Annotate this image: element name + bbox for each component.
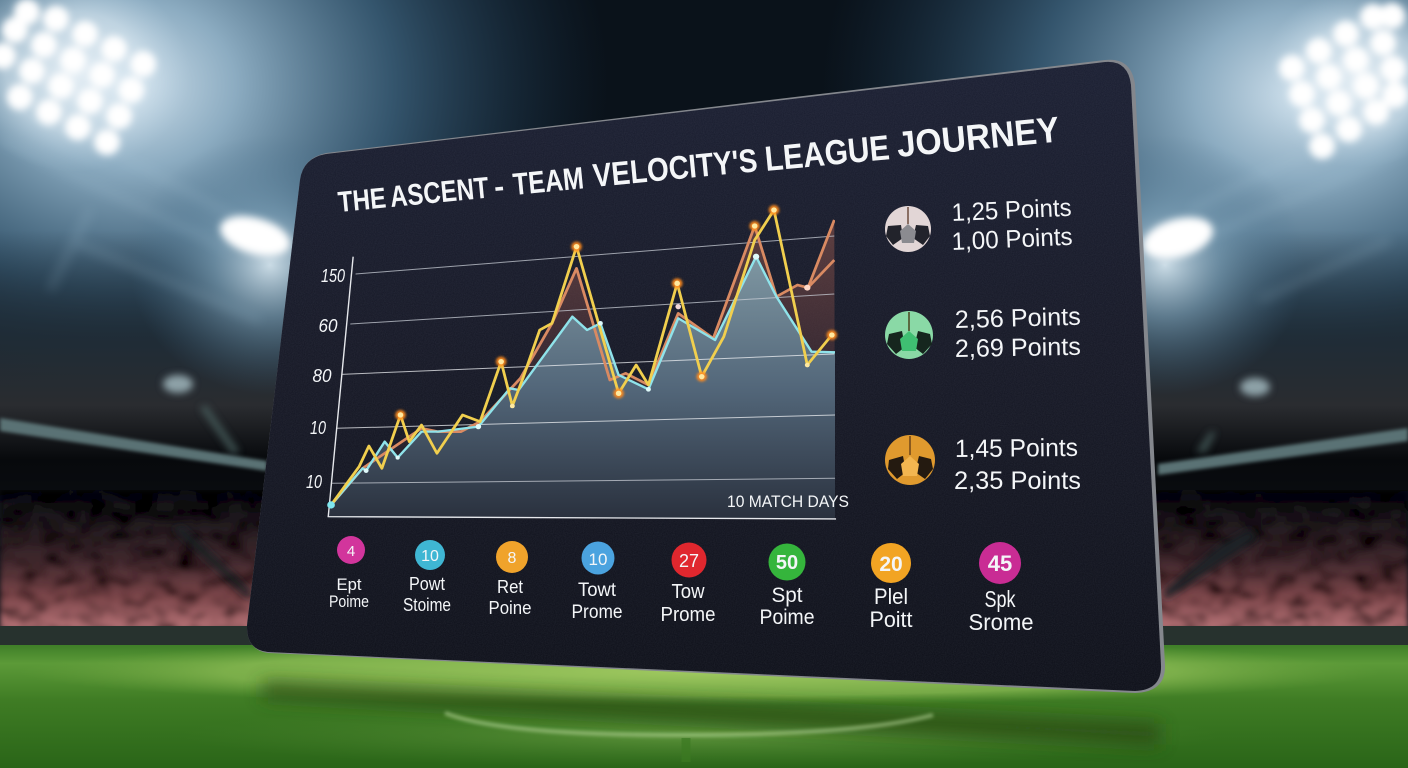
title	[337, 109, 1061, 219]
badge 2: Powt	[409, 574, 445, 594]
badge 7: 20	[879, 553, 903, 576]
points text: green: 2,69 Points	[955, 333, 1081, 363]
badge 6: Spt	[772, 584, 803, 607]
y axis labels	[306, 266, 345, 492]
title: JOURNEY	[895, 109, 1061, 165]
badge 4: Prome	[572, 602, 622, 623]
badge 8	[968, 542, 1034, 635]
points text: green: 2,56 Points	[954, 303, 1081, 334]
title: -	[493, 170, 506, 204]
badge 3: Poine	[488, 598, 532, 618]
badge 5	[660, 542, 716, 626]
axes	[328, 257, 836, 519]
points text: gold: 2,35 Points	[954, 467, 1081, 495]
badge 5: 27	[679, 551, 699, 571]
title: ASCENT	[389, 172, 490, 214]
badge 4	[572, 542, 622, 623]
badge 2	[403, 540, 451, 615]
title: THE	[337, 183, 387, 219]
badge 7: Plel	[874, 584, 908, 609]
badge 1: 4	[347, 543, 355, 560]
glowing points	[327, 205, 837, 509]
badge 5: Tow	[672, 581, 705, 603]
line chart	[327, 205, 837, 519]
badge 2: Stoime	[403, 595, 451, 615]
football icon: silver	[885, 206, 931, 252]
badge 7	[870, 543, 912, 632]
points text: silver	[951, 194, 1073, 256]
badge 3	[488, 541, 532, 618]
floodlight mid left	[215, 209, 295, 263]
badge 6: 50	[776, 552, 798, 574]
badge 1: Ept	[336, 575, 362, 594]
points text: silver: 1,25 Points	[951, 194, 1072, 227]
y axis labels: 10	[306, 472, 322, 492]
football icon: green	[885, 311, 933, 359]
title: LEAGUE	[763, 128, 891, 179]
badge 3: 8	[508, 550, 517, 567]
floodlight top right	[1260, 0, 1408, 168]
badge 6	[760, 544, 814, 629]
badge 7: Poitt	[870, 607, 912, 632]
cyan series	[331, 257, 835, 505]
badge 1: Poime	[329, 592, 369, 611]
points text: green	[954, 303, 1081, 363]
badge 8: Srome	[968, 609, 1034, 635]
teal area	[328, 257, 835, 518]
floodlight mid right	[1138, 210, 1218, 266]
x axis label: 10 MATCH DAYS	[727, 492, 849, 511]
badge 4: Towt	[578, 580, 617, 601]
points text: gold: 1,45 Points	[955, 434, 1078, 463]
badge 2: 10	[421, 548, 439, 565]
badge 8: 45	[988, 551, 1012, 576]
panel: league journey card	[247, 60, 1165, 693]
title: VELOCITY'S	[591, 141, 759, 194]
points text: gold	[954, 434, 1081, 495]
badge 3: Ret	[497, 577, 523, 597]
y axis labels: 80	[312, 366, 332, 386]
y axis labels: 10	[310, 418, 326, 438]
grid lines	[331, 236, 835, 483]
floodlight top left	[0, 0, 190, 172]
football icon: gold	[885, 435, 935, 485]
orange series	[331, 220, 834, 505]
yellow series	[331, 210, 832, 505]
y axis labels: 150	[321, 266, 345, 286]
badge 6: Poime	[760, 606, 814, 629]
badge 4: 10	[589, 550, 607, 569]
badge 8: Spk	[984, 586, 1016, 612]
points text: silver: 1,00 Points	[951, 223, 1073, 256]
badge 1	[329, 536, 369, 611]
match badge row	[329, 536, 1034, 635]
badge 5: Prome	[660, 604, 716, 626]
football pitch	[0, 638, 1408, 768]
y axis labels: 60	[318, 316, 338, 336]
orange area	[366, 224, 834, 468]
title: TEAM	[511, 160, 585, 202]
